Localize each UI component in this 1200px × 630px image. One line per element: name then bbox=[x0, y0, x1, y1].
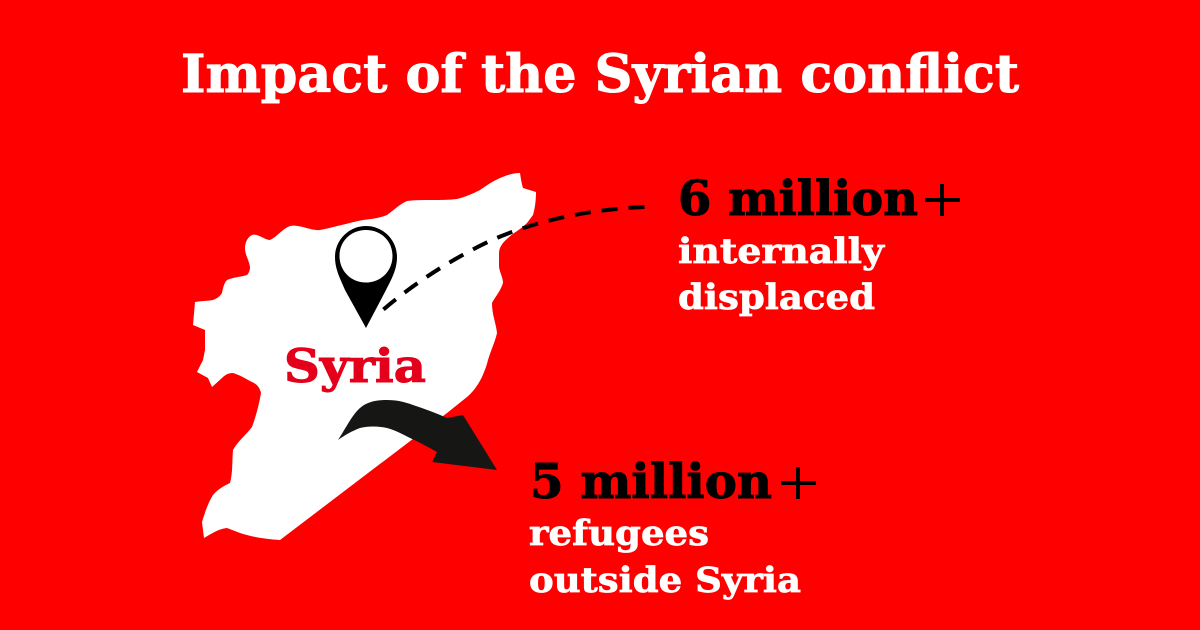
label: refugees outside Syria: refugees bbox=[529, 513, 709, 554]
plus sign bbox=[781, 467, 816, 499]
icon: map pin bbox=[335, 226, 397, 328]
stat: refugees: outside Syria bbox=[529, 560, 801, 601]
plus sign bbox=[925, 184, 960, 216]
map label: Syria: Syria bbox=[284, 339, 426, 393]
stat: refugees bbox=[529, 454, 816, 601]
stat: internally displaced bbox=[678, 171, 960, 318]
dashed line bbox=[376, 207, 645, 316]
map of Syria bbox=[193, 173, 536, 540]
arrow bbox=[338, 400, 497, 470]
title: Impact of the Syrian conflict bbox=[181, 44, 1019, 105]
stat: internally displaced: displaced bbox=[678, 277, 875, 318]
number: 5 million+: 5 million bbox=[530, 454, 772, 510]
number: 6 million+: 6 million bbox=[678, 171, 918, 227]
label: internally displaced: internally bbox=[678, 231, 886, 272]
